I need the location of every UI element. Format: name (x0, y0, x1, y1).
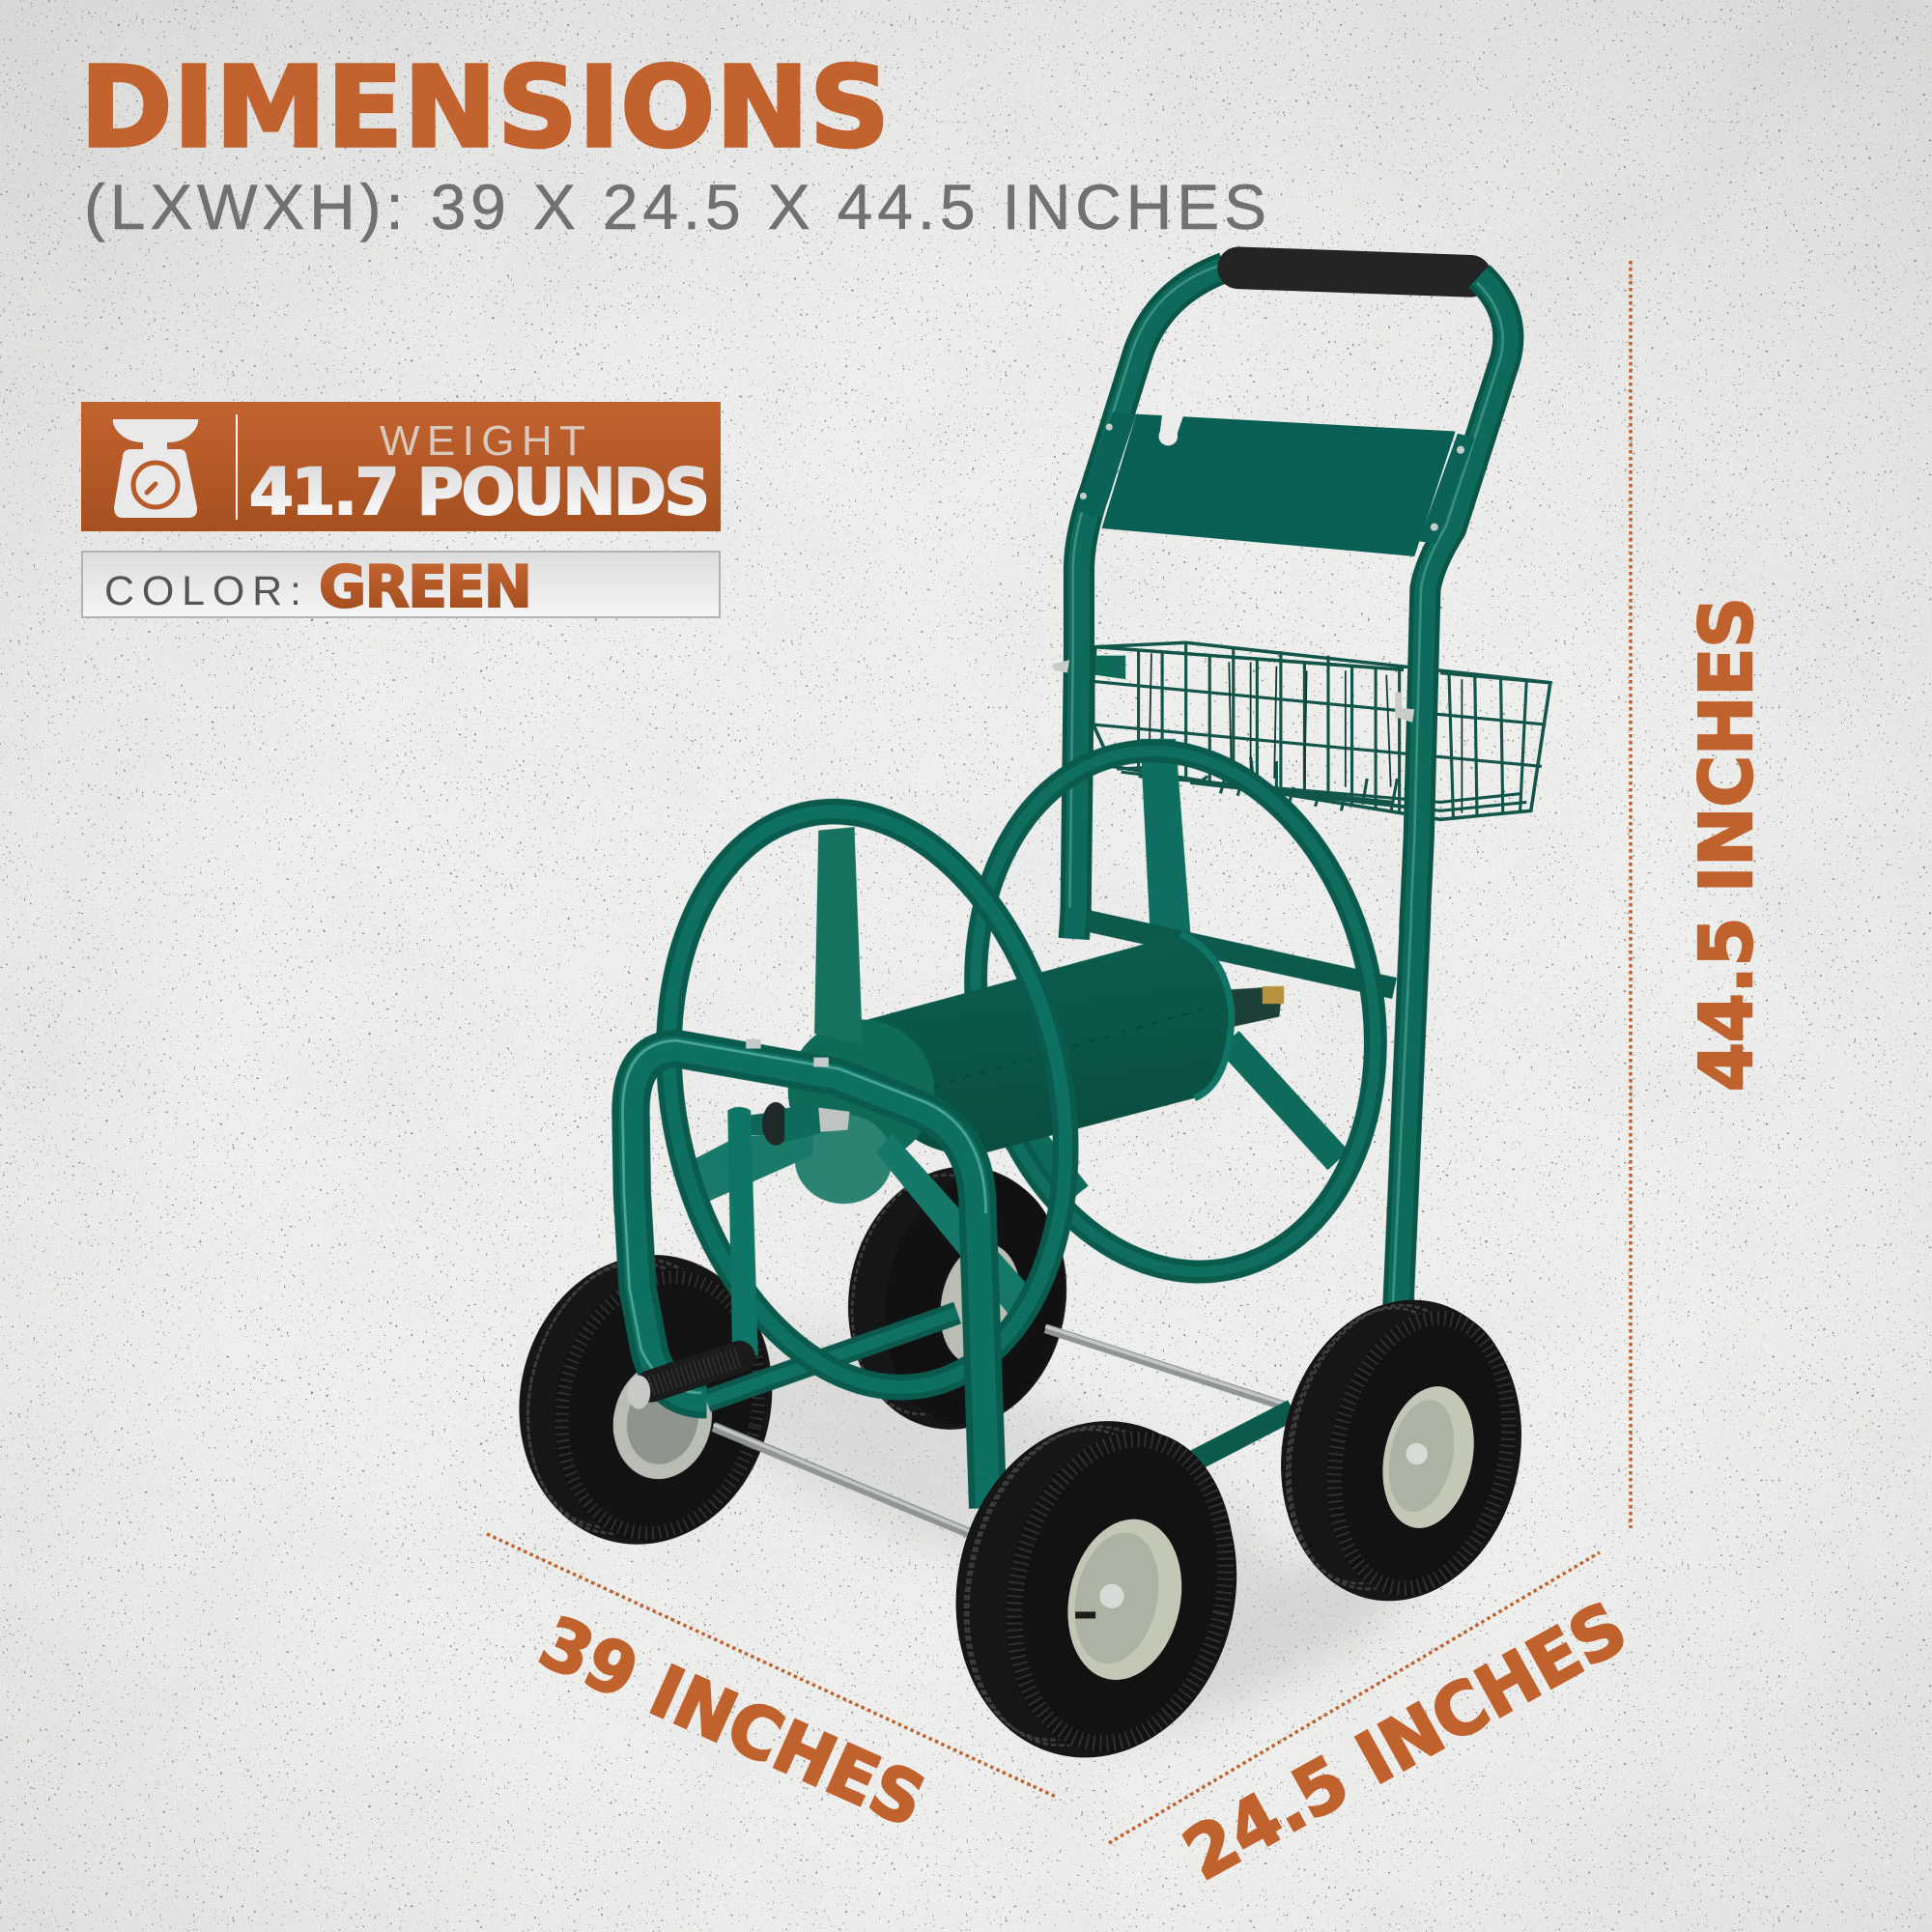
basket (1094, 642, 1550, 819)
back wheel (828, 1149, 1087, 1447)
reel hub (788, 1019, 934, 1204)
panel: color (82, 552, 720, 621)
dimension line: length (487, 1534, 1056, 1797)
ground shadow (646, 1278, 1435, 1768)
drum (866, 934, 1234, 1155)
right upright lower (1392, 908, 1415, 1315)
dimension line: height (1629, 261, 1633, 1528)
weight label: WEIGHT (380, 417, 585, 465)
bolts on frame (746, 1039, 829, 1066)
cross bars (706, 1313, 1293, 1461)
weight value: 41.7 POUNDS (249, 455, 710, 529)
dimension label: 24.5 inches: 24.5 INCHES (1171, 1586, 1640, 1896)
icon: hose reel cart lower assembly (491, 713, 1548, 1784)
icon: kitchen scale (113, 419, 198, 518)
subtitle: overall dimensions: (LXWXH): 39 X 24.5 X 44.5 INCHES (84, 171, 1266, 242)
back plate (1076, 412, 1475, 556)
left upright lower and back spokes (1025, 739, 1395, 1193)
icon: hose reel cart upper frame with handle (1052, 266, 1550, 929)
color value: GREEN (319, 554, 532, 621)
crank arm and grip (627, 1102, 850, 1409)
left upright tube (1069, 266, 1225, 929)
left wheel (491, 1230, 801, 1570)
dimension line: width (1109, 1552, 1600, 1843)
axle rods (714, 1326, 1286, 1535)
dimension label: 44.5 inches: 44.5 INCHES (1684, 597, 1769, 1092)
rear right wheel (1254, 1277, 1548, 1624)
front reel ring (617, 775, 1117, 1425)
panel: weight (81, 402, 721, 531)
front right wheel (925, 1395, 1267, 1784)
wing bolts (1052, 660, 1414, 723)
back reel ring (928, 713, 1423, 1309)
dimension label: 39 inches: 39 INCHES (528, 1601, 937, 1844)
black foam grip (1238, 268, 1470, 276)
front reel spokes (688, 827, 1027, 1317)
title: DIMENSIONS (80, 43, 890, 173)
right upright tube (1410, 276, 1508, 929)
color label: COLOR: (104, 568, 301, 614)
front U frame (623, 1040, 988, 1508)
